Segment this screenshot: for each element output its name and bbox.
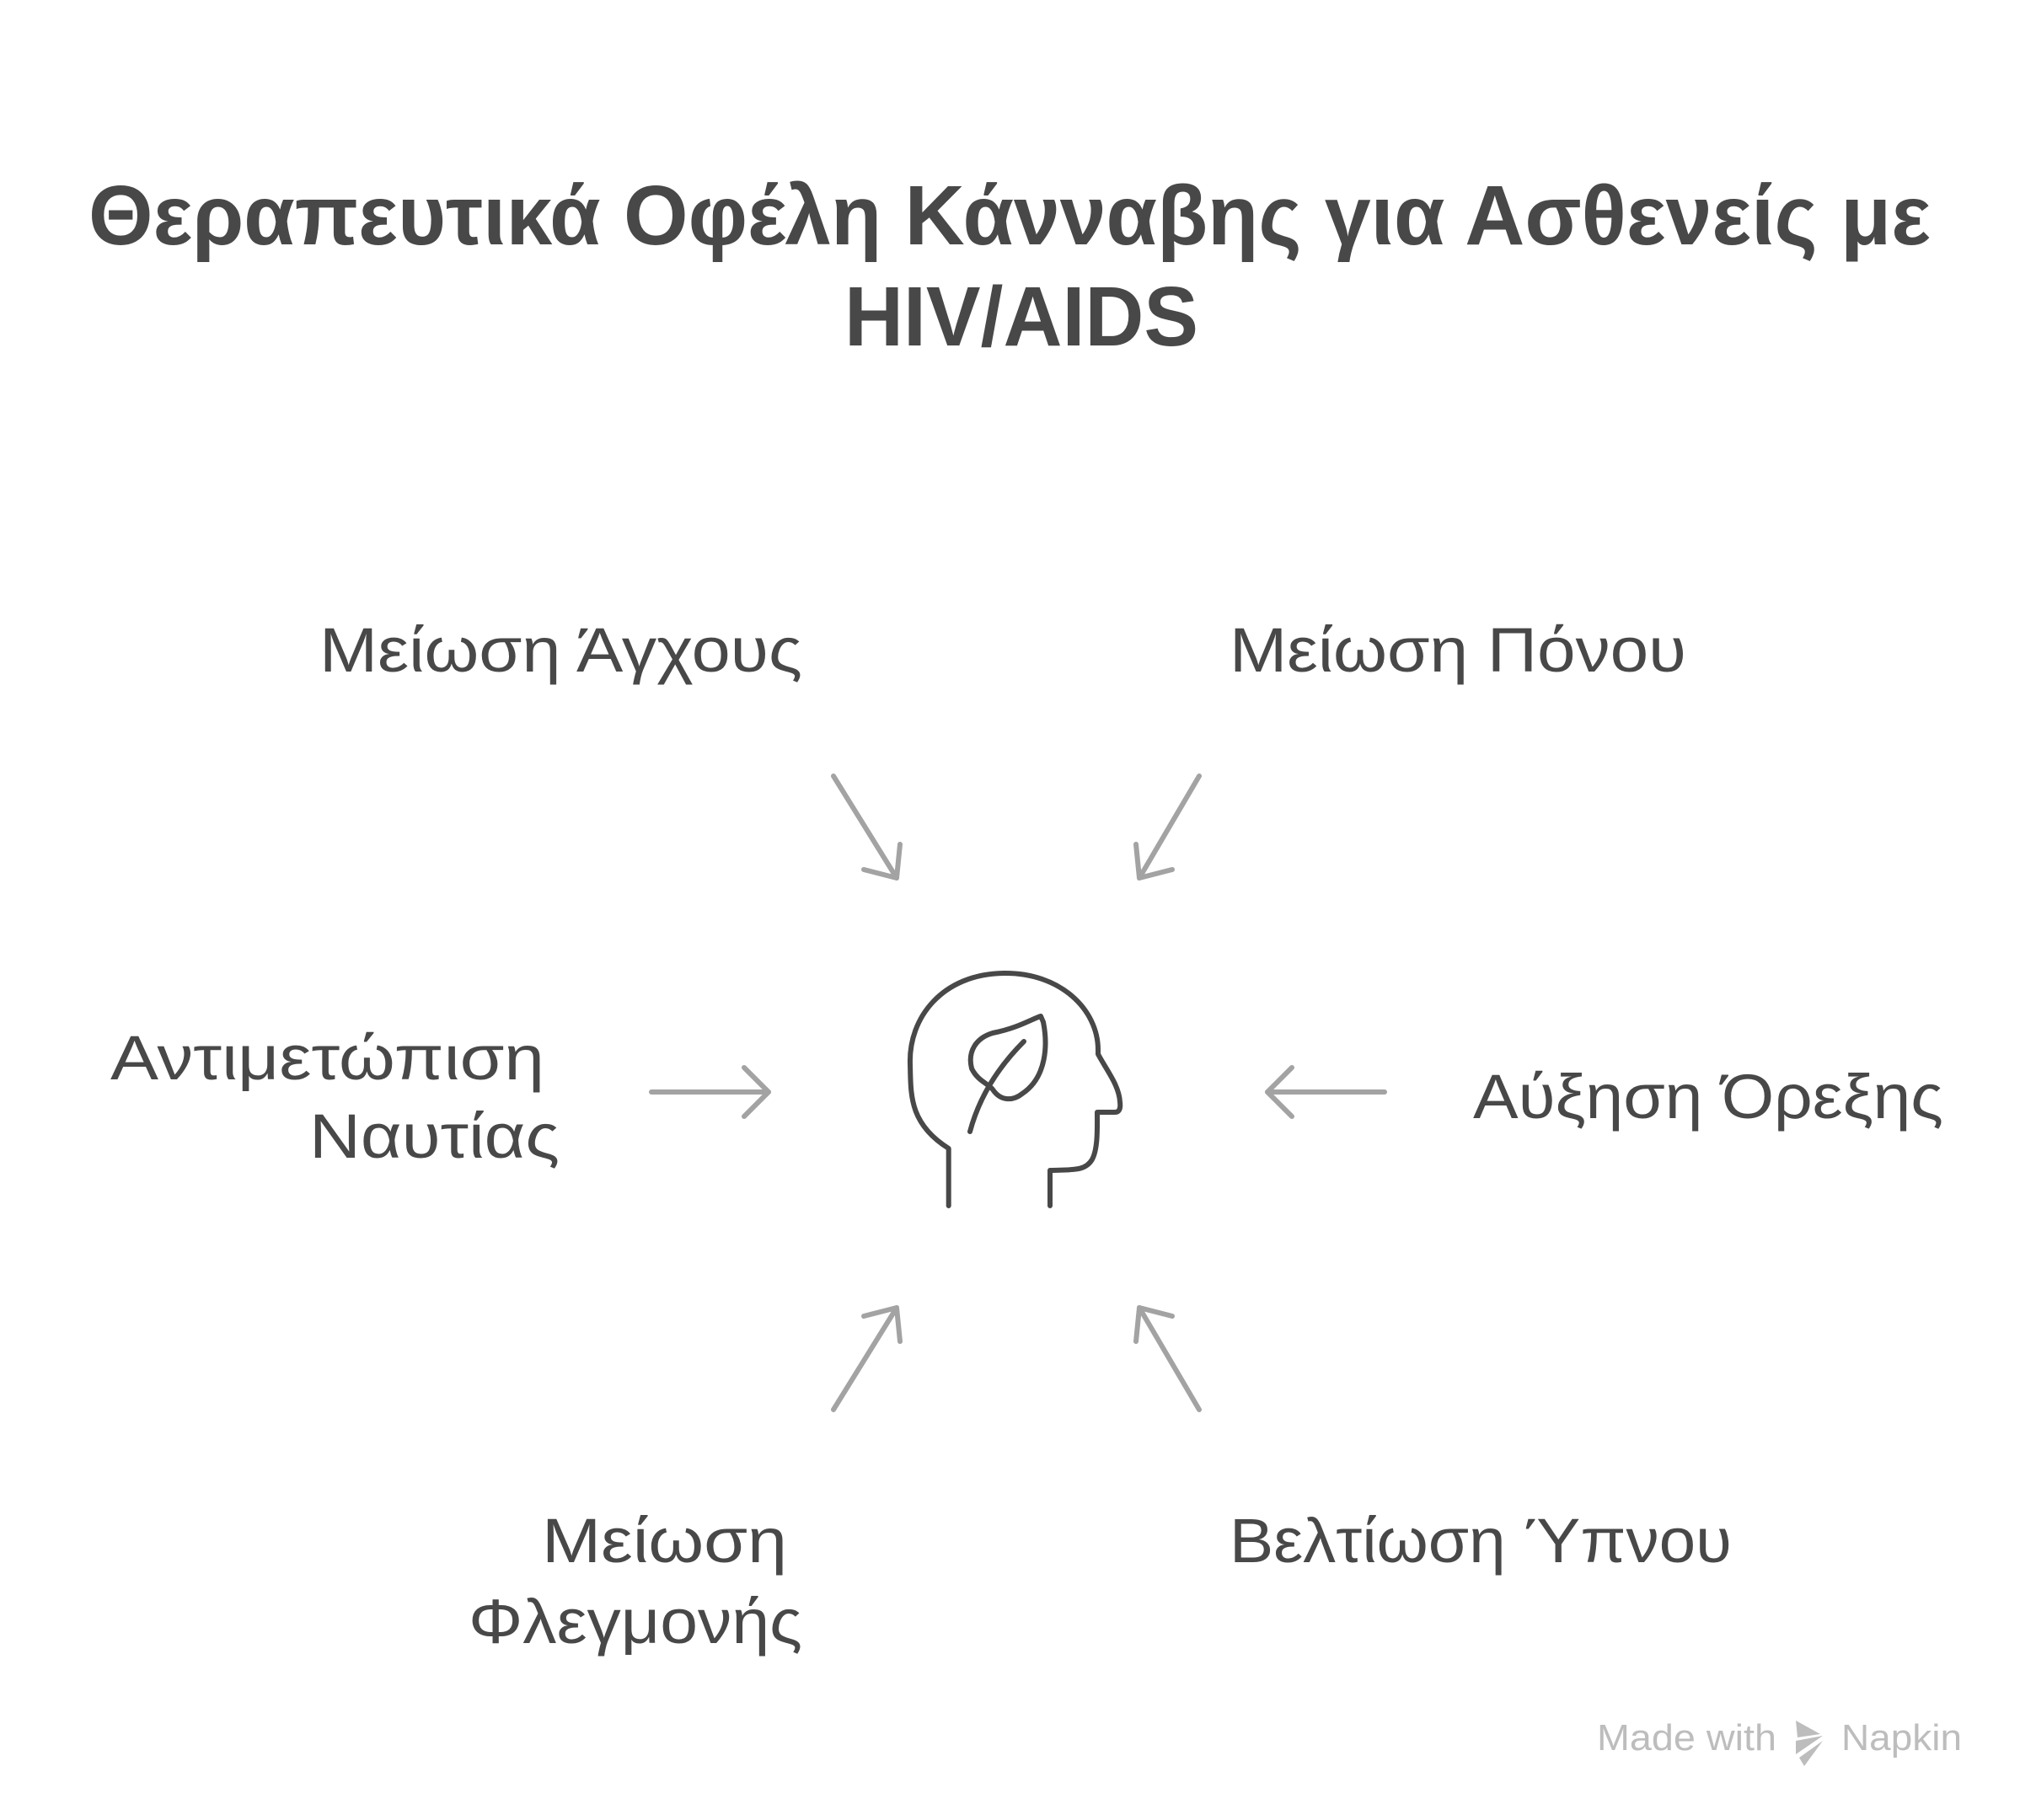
label: Αντιμετώπιση Ναυτίας	[110, 1023, 560, 1171]
arrow: right	[1267, 1068, 1385, 1116]
watermark	[1597, 1717, 1962, 1766]
label: Μείωση Φλεγμονής: Φλεγμονής	[469, 1587, 802, 1657]
title	[88, 169, 1931, 364]
label: Μείωση Άγχους: Μείωση Άγχους	[319, 615, 802, 685]
label: Μείωση Φλεγμονής	[469, 1506, 802, 1657]
label: Αντιμετώπιση Ναυτίας: Αντιμετώπιση	[110, 1023, 544, 1093]
title: HIV/AIDS	[844, 270, 1198, 364]
arrows	[651, 776, 1385, 1410]
icon: head with leaf	[910, 973, 1120, 1206]
diagram	[110, 615, 1943, 1657]
label: Αύξηση Όρεξης: Αύξηση Όρεξης	[1473, 1062, 1943, 1132]
arrow: top-right	[1136, 776, 1199, 878]
arrow: top-left	[833, 776, 900, 878]
label: Αντιμετώπιση Ναυτίας: Ναυτίας	[309, 1101, 560, 1171]
label: Μείωση Πόνου: Μείωση Πόνου	[1230, 615, 1686, 685]
label: Βελτίωση Ύπνου: Βελτίωση Ύπνου	[1230, 1506, 1732, 1576]
arrow: bottom-left	[833, 1308, 900, 1410]
arrow: left	[651, 1068, 769, 1116]
arrow: bottom-right	[1136, 1308, 1199, 1410]
watermark: Napkin	[1841, 1717, 1962, 1758]
label: Μείωση Φλεγμονής: Μείωση	[542, 1506, 787, 1576]
title: Θεραπευτικά Οφέλη Κάνναβης για Ασθενείς με	[88, 169, 1931, 263]
watermark: Made with	[1597, 1717, 1776, 1758]
